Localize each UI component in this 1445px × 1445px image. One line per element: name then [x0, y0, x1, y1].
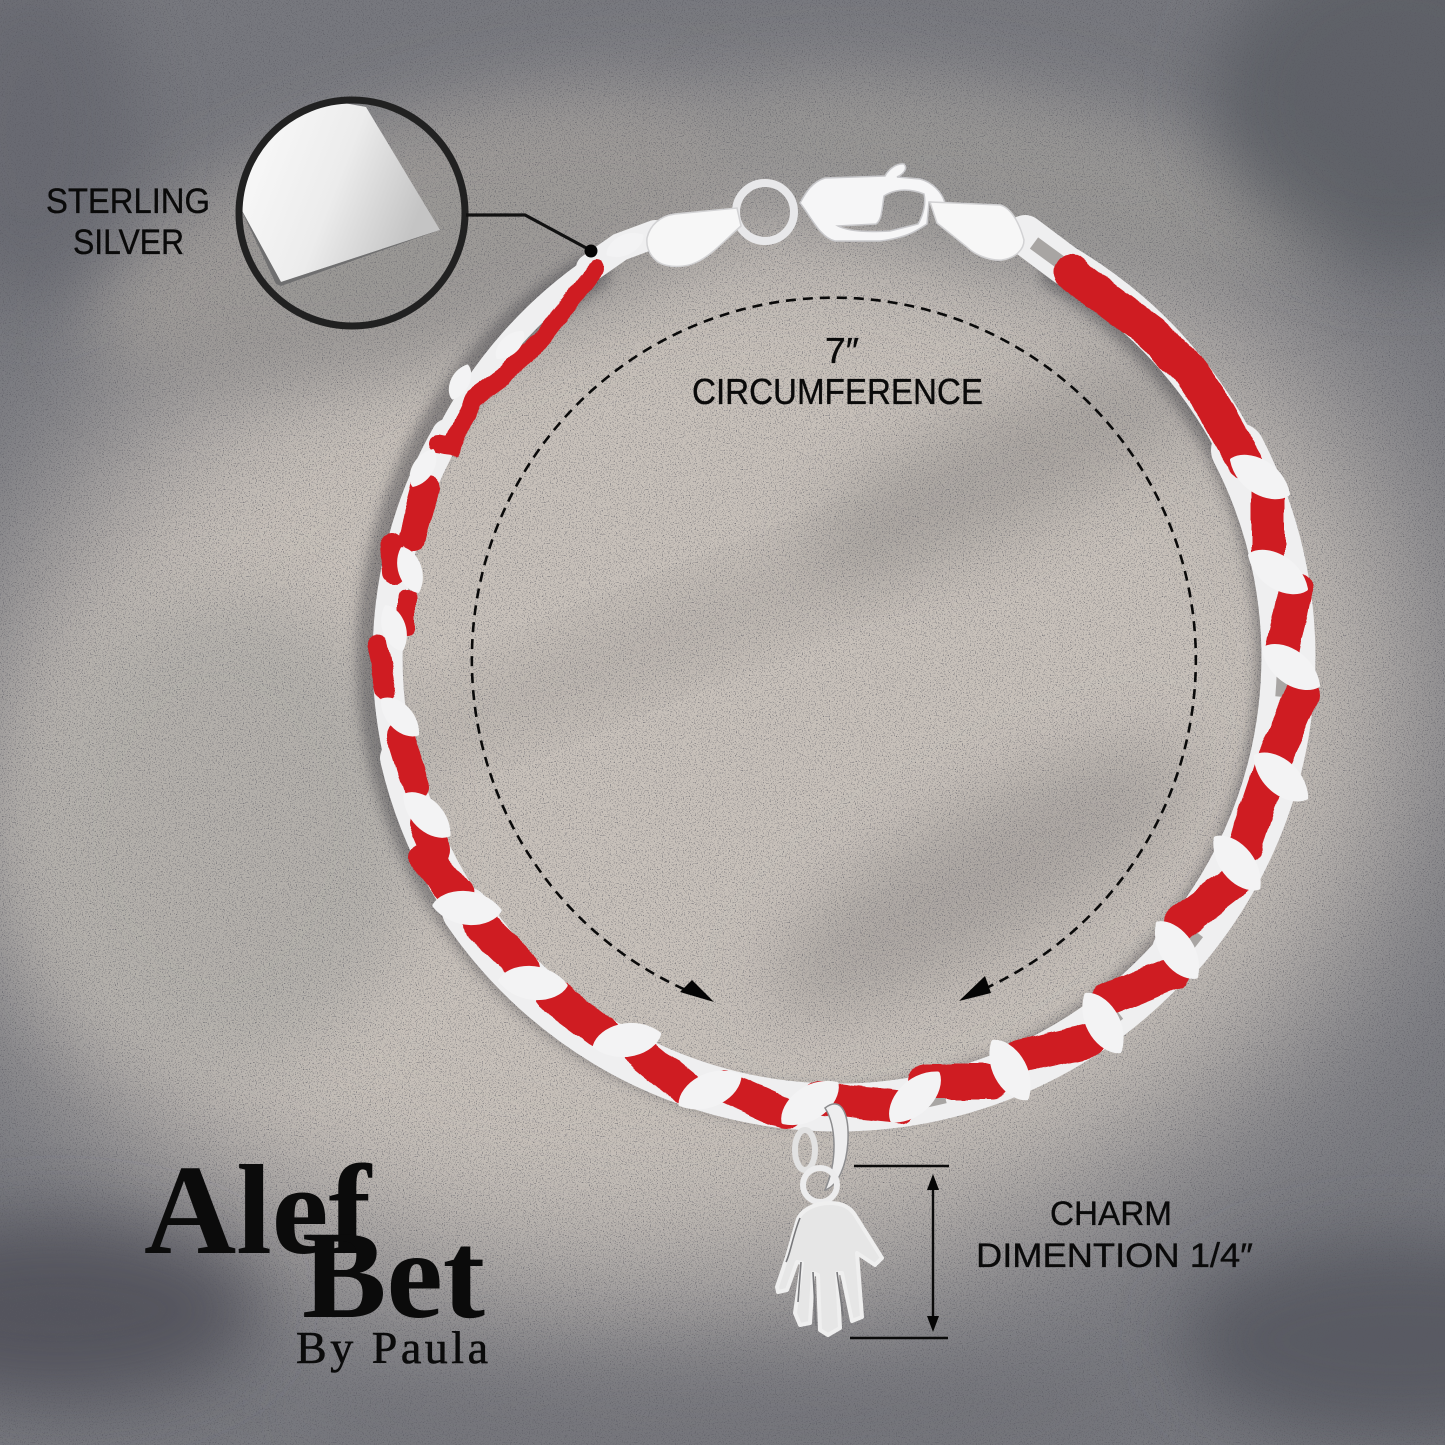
chain shadow: [376, 273, 1276, 1107]
leader line from magnifier to chain: [466, 215, 598, 258]
charm rings: [795, 1130, 815, 1170]
label: sterling silver: STERLING: [46, 182, 210, 221]
red thread segments: [378, 268, 1302, 1114]
label: charm dimension: [976, 1195, 1253, 1275]
bracelet: silver curb chain woven with red thread: [370, 224, 1320, 1137]
label: charm dimension: DIMENTION 1/4″: [976, 1237, 1253, 1275]
logo: Alef Bet By Paula: By Paula: [296, 1322, 488, 1373]
right connector: [930, 202, 1024, 260]
jump ring: [736, 183, 794, 241]
logo: Alef Bet By Paula: [144, 1139, 488, 1373]
charm dimension bracket and arrow: [850, 1166, 949, 1338]
silver sheet: [242, 104, 440, 286]
hand: [777, 1203, 882, 1335]
left connector: [647, 208, 741, 266]
label: 7 inch circumference: [692, 330, 983, 412]
label: 7 inch circumference: CIRCUMFERENCE: [692, 371, 983, 412]
logo: Alef Bet By Paula: Alef: [144, 1139, 372, 1281]
lobster claw: [800, 164, 945, 241]
charm: hand pendant: [777, 1104, 882, 1335]
logo: Alef Bet By Paula: Bet: [302, 1207, 485, 1345]
label: sterling silver: SILVER: [73, 223, 184, 262]
clasp: connectors, jump ring and lobster claw: [647, 164, 1024, 266]
openings between links: [520, 243, 1287, 1108]
label: charm dimension: CHARM: [1050, 1195, 1172, 1233]
dashed circumference arc with arrowheads: [472, 298, 1196, 1002]
silver rails: [388, 234, 1288, 1108]
label: 7 inch circumference: 7″: [825, 330, 859, 371]
label: sterling silver: [46, 182, 210, 262]
magnifier: sterling silver swatch: [230, 95, 465, 326]
silver link overlays: [370, 224, 1320, 1137]
